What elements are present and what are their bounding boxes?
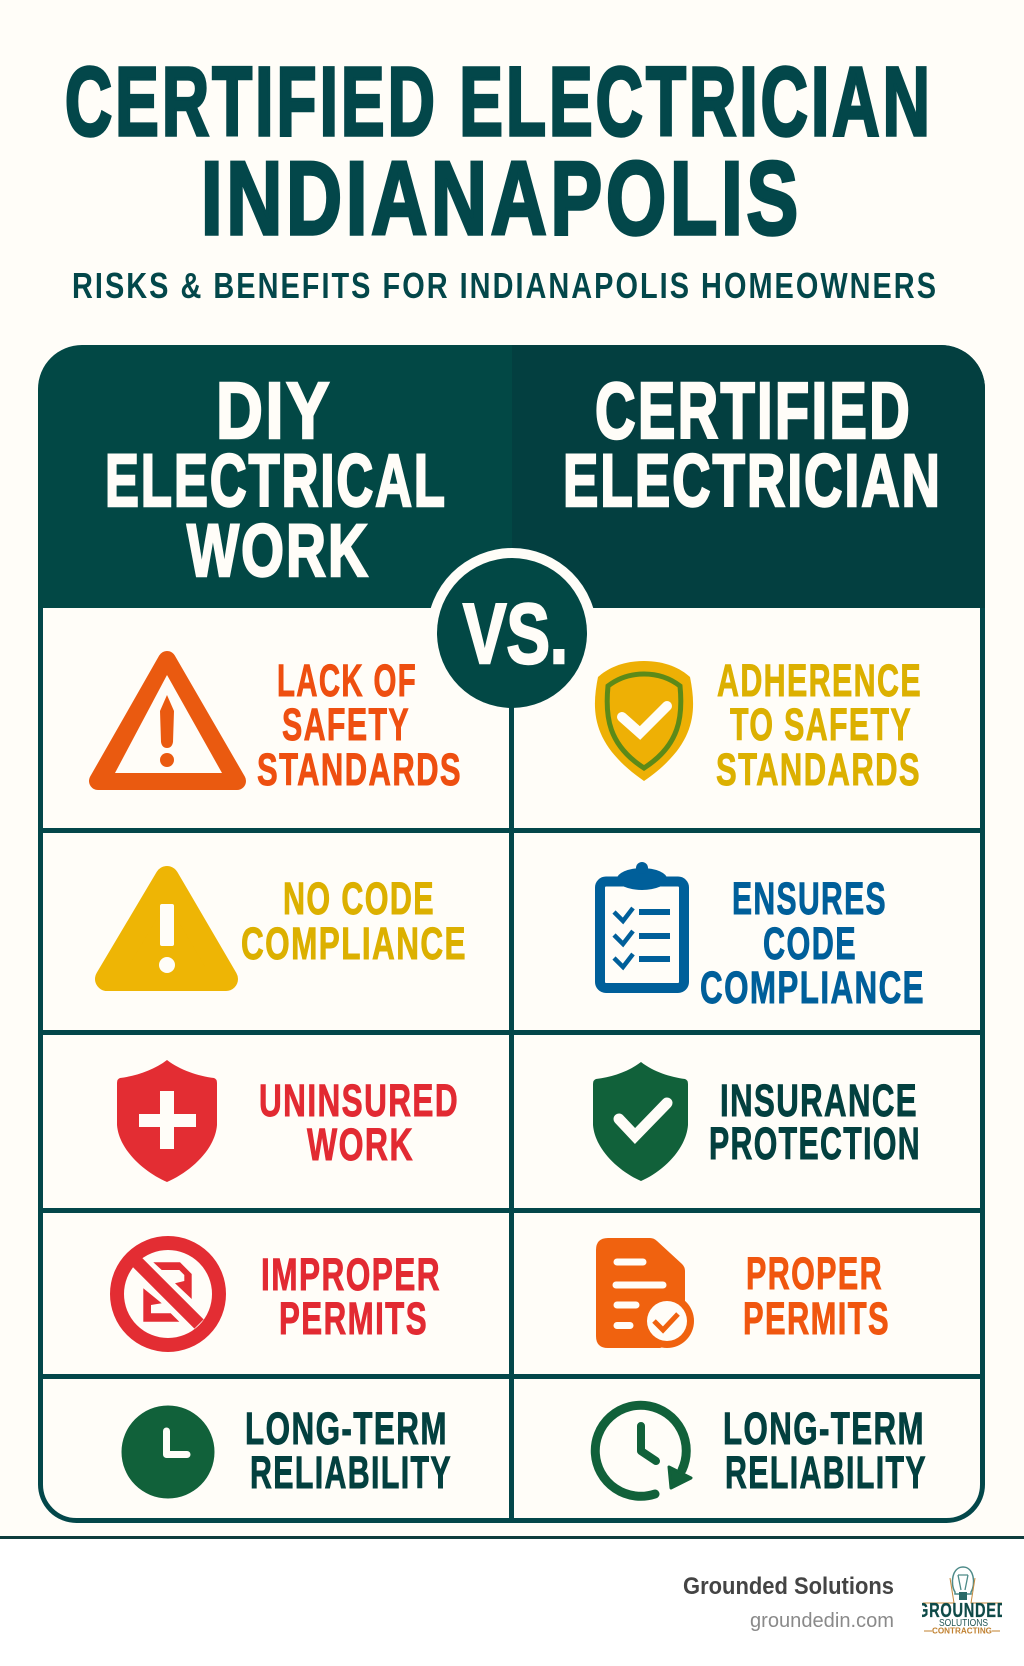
label: ensures code compliance: [700, 873, 925, 1013]
table frame and grid: [40, 360, 983, 1520]
label: improper permits: [261, 1249, 441, 1344]
icon: green shield with check: [593, 1062, 688, 1181]
logo: [922, 1566, 1002, 1634]
label: lack of safety standards: STANDARDS: [257, 744, 462, 795]
heading: DIY electrical work: DIY: [216, 366, 332, 455]
icon: yellow warning triangle: [107, 878, 226, 979]
row: insurance, certified: [593, 1062, 921, 1181]
label: lack of safety standards: SAFETY: [282, 699, 410, 750]
label: ensures code compliance: CODE: [763, 918, 857, 969]
label: uninsured work: UNINSURED: [259, 1075, 459, 1126]
icon: orange warning triangle: [98, 660, 237, 781]
label: insurance protection: INSURANCE: [720, 1075, 918, 1126]
label: no code compliance: COMPLIANCE: [241, 918, 467, 969]
label: insurance protection: [709, 1075, 921, 1169]
label: proper permits: [743, 1248, 890, 1344]
label: lack of safety standards: LACK OF: [277, 655, 417, 706]
logo: CONTRACTING: [932, 1626, 992, 1636]
icon: green clock with return arrow: [595, 1405, 691, 1496]
label: uninsured work: WORK: [307, 1119, 414, 1170]
title: INDIANAPOLIS: [201, 141, 802, 257]
title: [65, 47, 933, 257]
label: improper permits: IMPROPER: [261, 1249, 441, 1300]
label: ensures code compliance: COMPLIANCE: [700, 962, 925, 1013]
label: adherence to safety standards: STANDARDS: [716, 744, 921, 795]
label: long-term reliability, certified: RELIABILITY: [725, 1447, 927, 1498]
label: proper permits: PERMITS: [743, 1293, 890, 1344]
label: no code compliance: [241, 873, 467, 969]
heading: certified electrician: [563, 366, 942, 522]
icon: red prohibited permit: [117, 1243, 219, 1345]
row: permits, certified: [596, 1238, 890, 1348]
label: adherence to safety standards: TO SAFETY: [730, 699, 912, 750]
header band: [38, 345, 985, 608]
row: safety standards, certified: [595, 655, 922, 795]
footer website: groundedin.com: [750, 1610, 894, 1632]
label: improper permits: PERMITS: [279, 1293, 428, 1344]
label: lack of safety standards: [257, 655, 462, 795]
footer: [0, 1536, 1024, 1634]
label: long-term reliability, DIY: LONG-TERM: [245, 1403, 448, 1454]
heading: DIY electrical work: [105, 366, 447, 592]
label: long-term reliability, DIY: RELIABILITY: [250, 1447, 452, 1498]
heading: DIY electrical work: ELECTRICAL: [105, 439, 447, 522]
row: reliability, certified: [595, 1403, 927, 1498]
label: no code compliance: NO CODE: [283, 873, 435, 924]
label: adherence to safety standards: [716, 655, 922, 795]
logo: SOLUTIONS: [939, 1618, 988, 1629]
comparison table: [38, 345, 985, 1520]
VS badge: VS.: [463, 587, 568, 682]
label: long-term reliability, certified: LONG-TERM: [723, 1403, 925, 1454]
row: insurance, DIY: [117, 1060, 459, 1182]
label: ensures code compliance: ENSURES: [732, 873, 887, 924]
row: reliability, DIY: [122, 1403, 452, 1498]
footer company name: Grounded Solutions: [683, 1573, 894, 1600]
label: proper permits: PROPER: [746, 1248, 883, 1299]
label: insurance protection: PROTECTION: [709, 1118, 921, 1169]
label: uninsured work: [259, 1075, 459, 1170]
icon: red shield with cross: [117, 1060, 217, 1182]
row: code compliance, certified: [600, 862, 925, 1013]
label: long-term reliability, DIY: [245, 1403, 452, 1498]
icon: orange permit document: [596, 1238, 694, 1348]
label: adherence to safety standards: ADHERENCE: [717, 655, 922, 706]
row: safety standards, DIY: [98, 655, 462, 795]
heading: DIY electrical work: WORK: [187, 509, 370, 592]
icon: green clock disc: [122, 1406, 214, 1498]
row: code compliance, DIY: [107, 873, 467, 979]
row: permits, DIY: [117, 1243, 441, 1345]
label: long-term reliability, certified: [723, 1403, 927, 1498]
VS badge: [427, 548, 597, 718]
icon: yellow safety shield: [595, 661, 693, 781]
icon: blue clipboard checklist: [600, 862, 684, 988]
